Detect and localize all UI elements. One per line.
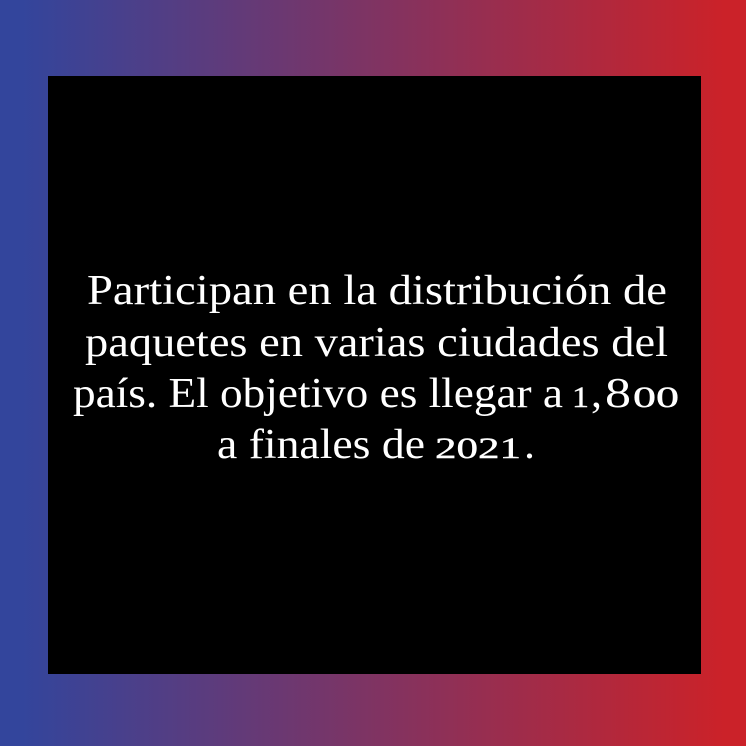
line 1: Participan en la distribución de [87, 268, 667, 314]
line 3: 00 [633, 381, 679, 414]
line 3: , [591, 371, 602, 417]
line 3: 8 [605, 371, 631, 417]
line 4: a finales de [217, 422, 425, 468]
line 4: . [524, 422, 535, 468]
line 4 [217, 422, 535, 468]
line 4: 2021 [435, 432, 521, 465]
line 3: país. El objetivo es llegar a [73, 371, 563, 417]
panel: black text box [48, 76, 701, 674]
line 2: paquetes en varias ciudades del [85, 320, 668, 366]
line 3: 1 [572, 381, 589, 414]
